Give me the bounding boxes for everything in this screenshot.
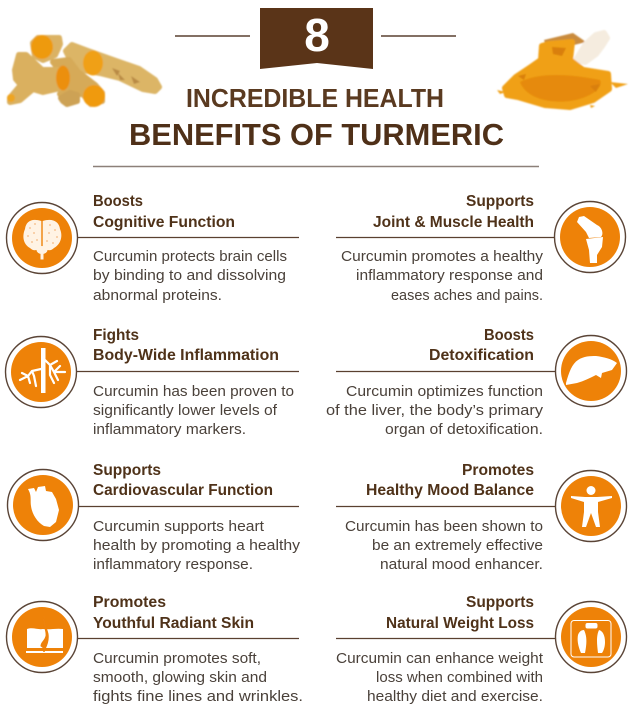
body text: significantly lower levels of	[93, 402, 278, 419]
body text: smooth, glowing skin and	[93, 669, 267, 686]
body text: organ of detoxification.	[385, 421, 543, 438]
body text: eases aches and pains.	[391, 287, 543, 304]
icon: human figure	[556, 470, 626, 542]
heading: Detoxification	[429, 347, 534, 364]
heading	[93, 327, 279, 364]
body text: Curcumin can enhance weight	[336, 650, 544, 667]
heading: Boosts	[484, 327, 534, 344]
heading: Natural Weight Loss	[386, 615, 534, 632]
heading: Supports	[93, 462, 161, 479]
panel: skin	[6, 594, 303, 705]
body text	[326, 383, 544, 438]
body text: loss when combined with	[376, 669, 543, 686]
heading: Fights	[93, 327, 139, 344]
body text: of the liver, the body’s primary	[326, 402, 544, 419]
body text: abnormal proteins.	[93, 287, 222, 304]
heading: Cognitive Function	[93, 214, 235, 231]
heading: Boosts	[93, 193, 143, 210]
heading	[366, 462, 534, 499]
panel: cognitive function	[6, 193, 299, 304]
body text	[345, 518, 543, 573]
icon: liver	[556, 336, 626, 406]
icon: skin and hair	[6, 602, 78, 672]
heading: Supports	[466, 594, 534, 611]
title line 2: BENEFITS OF TURMERIC	[129, 117, 504, 152]
heading: Youthful Radiant Skin	[93, 615, 254, 632]
body text: inflammatory response and	[356, 267, 543, 284]
heading: Healthy Mood Balance	[366, 482, 534, 499]
icon: heart	[8, 470, 78, 540]
body text: Curcumin has been shown to	[345, 518, 543, 535]
icon: brain	[6, 202, 78, 274]
image: turmeric powder with scoop	[497, 33, 628, 108]
body text	[336, 650, 544, 705]
heading	[93, 193, 235, 231]
body text: natural mood enhancer.	[380, 556, 543, 573]
panel: joint and muscle	[336, 193, 626, 304]
heading: Promotes	[93, 594, 166, 611]
panel: cardiovascular	[8, 462, 301, 573]
body text: be an extremely effective	[372, 537, 543, 554]
body text: Curcumin protects brain cells	[93, 248, 287, 265]
body text: Curcumin has been proven to	[93, 383, 294, 400]
heading: Joint & Muscle Health	[373, 214, 534, 231]
heading	[429, 327, 534, 364]
panel: inflammation	[6, 327, 299, 438]
body text	[93, 248, 287, 304]
panel: weight loss	[336, 594, 626, 705]
body text	[93, 518, 301, 573]
heading: Promotes	[462, 462, 534, 479]
heading	[373, 193, 534, 231]
panel: detoxification	[326, 327, 626, 438]
body text: Curcumin promotes a healthy	[341, 248, 544, 265]
heading: Body-Wide Inflammation	[93, 347, 279, 364]
body text: health by promoting a healthy	[93, 537, 301, 554]
heading: Supports	[466, 193, 534, 210]
body text: fights fine lines and wrinkles.	[93, 688, 303, 705]
body text: healthy diet and exercise.	[367, 688, 543, 705]
header: number badge: 8	[304, 9, 330, 61]
panel: mood balance	[336, 462, 626, 573]
title line 1: INCREDIBLE HEALTH	[186, 83, 444, 113]
body text: Curcumin optimizes function	[346, 383, 543, 400]
heading: Cardiovascular Function	[93, 482, 273, 499]
heading	[386, 594, 534, 632]
body text	[93, 383, 294, 438]
body text: inflammatory markers.	[93, 421, 246, 438]
body text: Curcumin supports heart	[93, 518, 265, 535]
body text	[93, 650, 303, 705]
heading	[93, 594, 254, 632]
icon: artery	[6, 336, 76, 408]
heading	[93, 462, 273, 499]
body text: by binding to and dissolving	[93, 267, 286, 284]
icon: scale	[556, 602, 626, 672]
icon: knee joint	[554, 202, 626, 272]
image: turmeric roots	[7, 35, 159, 107]
badge side rules	[175, 35, 456, 37]
body text	[341, 248, 544, 304]
header: number badge	[260, 8, 373, 69]
body text: inflammatory response.	[93, 556, 253, 573]
body text: Curcumin promotes soft,	[93, 650, 261, 667]
